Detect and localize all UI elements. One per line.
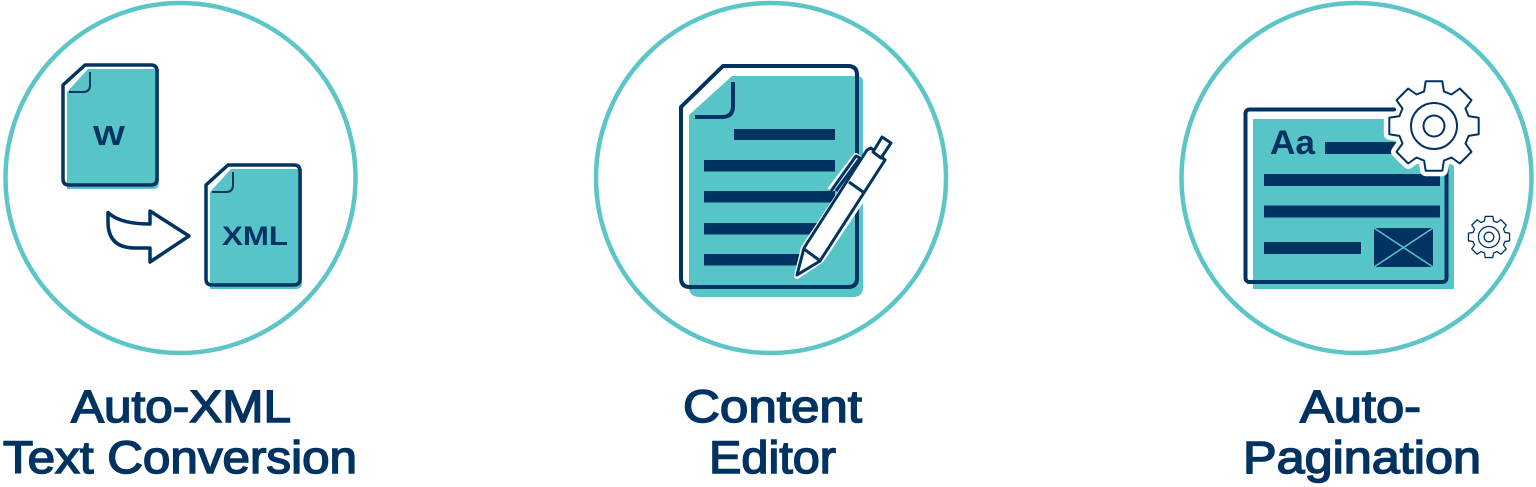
label: W: W <box>93 120 126 151</box>
heading: Auto-XML Text Conversion: Text Conversion <box>3 432 357 483</box>
icon: large gear <box>1389 81 1479 171</box>
icon: W document <box>63 65 159 189</box>
arrow <box>108 211 189 262</box>
icon: page layout with gears <box>1246 81 1510 289</box>
circle: content editor <box>596 3 946 353</box>
panel: content editor <box>596 3 946 483</box>
heading: Auto-Pagination <box>1243 381 1481 483</box>
heading: Auto-Pagination: Auto- <box>1300 381 1421 432</box>
heading: Auto-XML Text Conversion: Auto-XML <box>71 381 291 432</box>
heading: Content Editor: Editor <box>709 432 836 483</box>
heading: Auto-Pagination: Pagination <box>1243 432 1481 483</box>
panel: auto-XML text conversion <box>3 3 357 483</box>
heading: Auto-XML Text Conversion <box>3 381 357 483</box>
icon: pen <box>797 137 891 276</box>
icon: small gear <box>1468 216 1510 258</box>
icon: document with pen <box>681 66 891 297</box>
label: Aa: Aa <box>1270 124 1316 162</box>
panel: auto-pagination <box>1182 3 1532 483</box>
icon: image placeholder <box>1374 228 1433 267</box>
label: XML: XML <box>222 221 288 251</box>
heading: Content Editor: Content <box>683 381 863 432</box>
icon: XML document <box>206 165 302 289</box>
heading: Content Editor <box>683 381 863 483</box>
circle: auto-pagination <box>1182 3 1532 353</box>
circle: auto-XML <box>6 3 356 353</box>
